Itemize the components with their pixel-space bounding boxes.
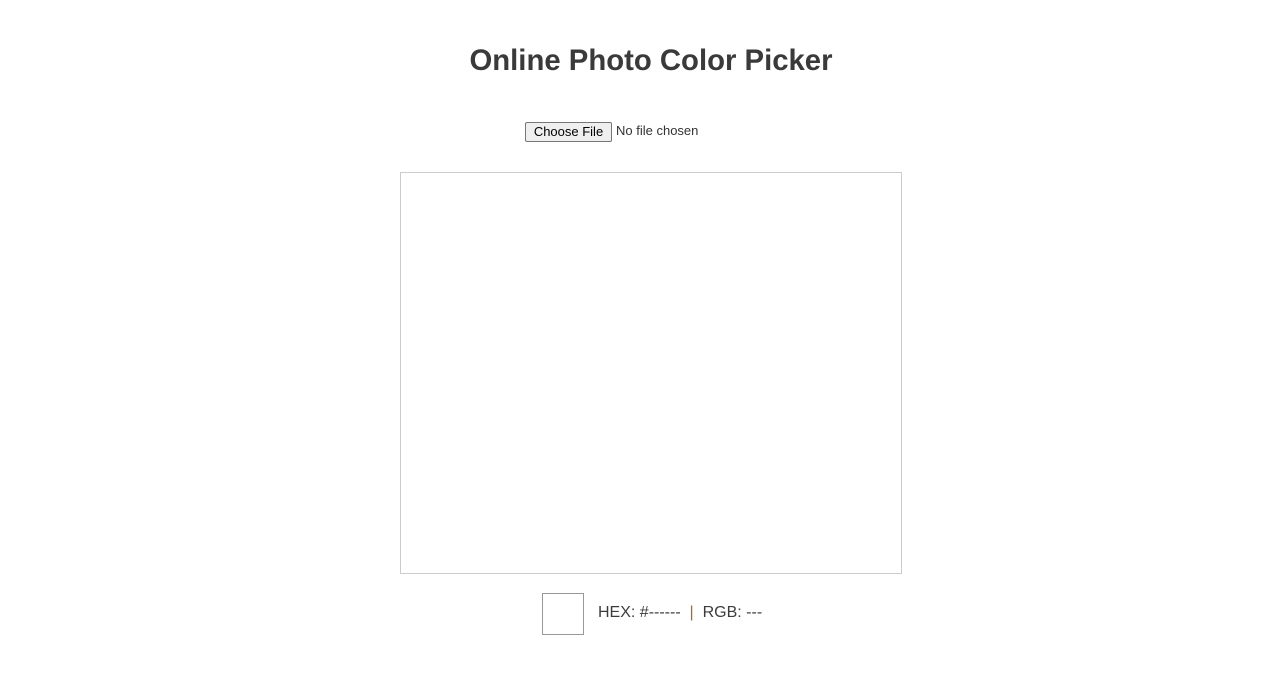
title: Online Photo Color Picker [469, 44, 832, 77]
color swatch [542, 593, 584, 635]
canvas panel [400, 172, 902, 574]
button: choose file: Choose File [534, 124, 603, 139]
file status text: No file chosen [616, 123, 698, 138]
color values text: HEX: #------ | RGB: --- [598, 604, 762, 621]
file input [525, 122, 698, 142]
button: choose file [525, 122, 612, 142]
